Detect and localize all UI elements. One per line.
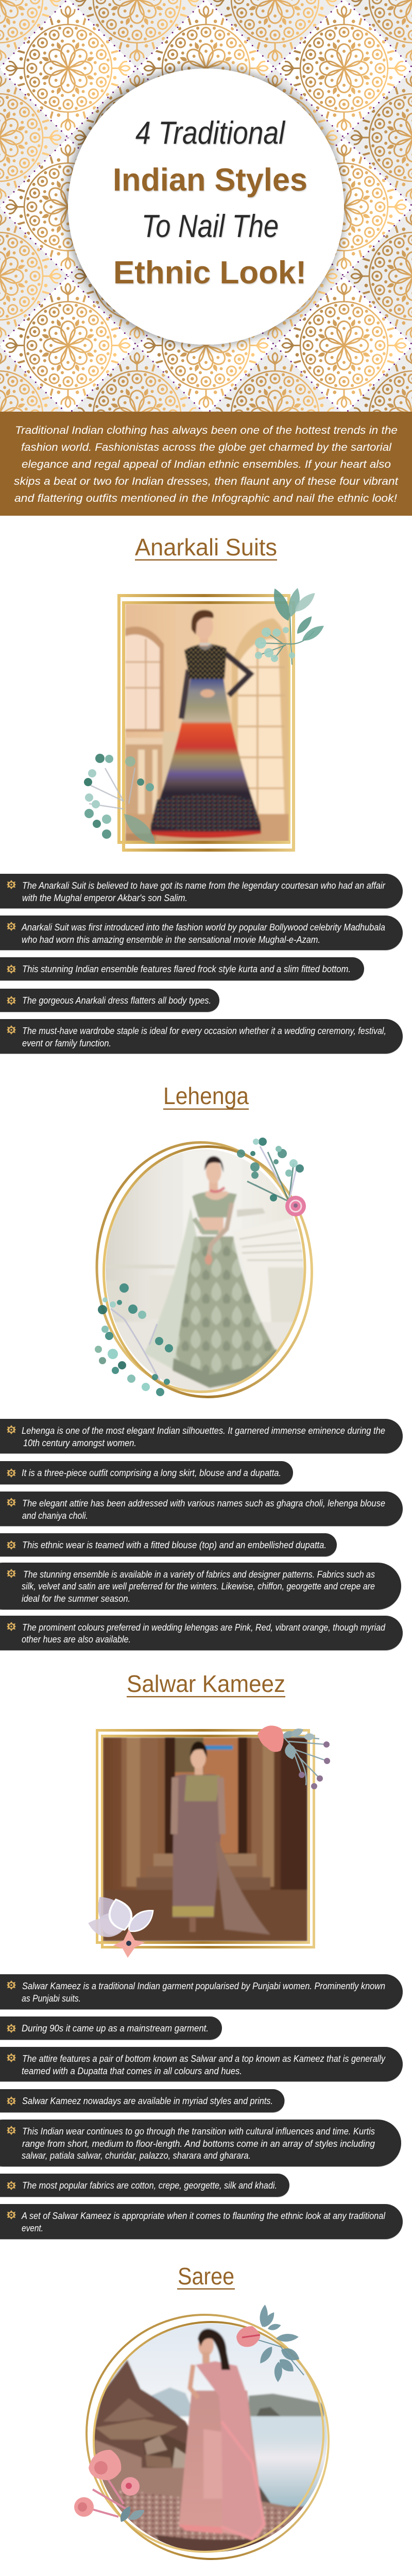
bullet 2 (0, 1461, 293, 1485)
bullet 5 (0, 1563, 401, 1610)
bullet 1 (0, 874, 403, 909)
intro band (0, 412, 412, 516)
heading: Saree: Saree (178, 2263, 234, 2290)
title circle (68, 69, 344, 345)
bullet 1: Salwar Kameez is a traditional Indian garment popularised by Punjabi women. Prominently known (22, 1981, 385, 1991)
bullets: Anarkali (0, 874, 403, 1054)
figure: woman in salwar kameez (173, 1741, 270, 1935)
title text (113, 115, 307, 291)
bullet 3 (0, 1492, 403, 1527)
intro band: skips a beat or two for Indian dresses, then flaunt any of these four vibrant (14, 476, 399, 487)
bullet 2: During 90s it came up as a mainstream garment. (22, 2023, 209, 2033)
bullet 5: ideal for the summer season. (22, 1594, 130, 1604)
icon: pink flowers lower left (74, 2450, 146, 2524)
intro band: and flattering outfits mentioned in the Infographic and nail the ethnic look! (14, 493, 397, 504)
bullet 2: Anarkali Suit was first introduced into the fashion world by popular Bollywood celebrity Madhubala (21, 922, 385, 933)
bullet 5: The stunning ensemble is available in a variety of fabrics and designer patterns. Fabrics such as (23, 1569, 375, 1580)
title text: 4 Traditional (135, 115, 286, 151)
bullets: Lehenga (0, 1419, 403, 1651)
bullet 6 (0, 2174, 289, 2197)
bullet 2: who had worn this amazing ensemble in the sensational movie Mughal-e-Azam. (22, 935, 320, 945)
photo panel: Saree in gold rings (74, 2304, 330, 2559)
icon: flower and leaves upper right (236, 2304, 304, 2382)
bullet 1 (0, 1974, 403, 2010)
bullet 4 (0, 2089, 284, 2113)
bullet 3: teamed with a Dupatta that comes in all colours and hues. (22, 2066, 242, 2076)
heading: Anarkali Suits: Anarkali Suits (135, 534, 277, 561)
heading: Salwar Kameez: Salwar Kameez (127, 1670, 285, 1697)
bullet 1: with the Mughal emperor Akbar's son Salim. (22, 893, 187, 903)
bullets: Salwar Kameez (0, 1974, 403, 2240)
bullet 3 (0, 957, 364, 981)
bullet 1: Lehenga is one of the most elegant Indian silhouettes. It garnered immense eminence during the (22, 1426, 385, 1436)
bullet 5 (0, 1019, 403, 1054)
icon: lavender leaves and flower lower left (86, 1890, 158, 1958)
photo panel: Lehenga in gold rings (95, 1138, 312, 1397)
icon: foliage lower left (84, 754, 160, 849)
hero mandala pattern background (0, 0, 412, 412)
photo panel: Anarkali suit in gold frame (84, 586, 327, 850)
icon: foliage and rose upper right (237, 1138, 306, 1216)
bullet 3: The elegant attire has been addressed with various names such as ghagra choli, lehenga blouse (22, 1498, 385, 1509)
icon: flower and leaves upper right (258, 1725, 330, 1789)
heading: Lehenga: Lehenga (163, 1082, 249, 1109)
bullet 3 (0, 2047, 403, 2082)
bullet 7: event. (22, 2223, 43, 2233)
bullet 7 (0, 2204, 403, 2240)
title text: Indian Styles (113, 162, 307, 198)
figure: woman in Anarkali (150, 610, 261, 838)
figure: woman in lehenga (144, 1156, 278, 1388)
bullet 3: and chaniya choli. (22, 1511, 88, 1521)
bullet 4: Salwar Kameez nowadays are available in myriad styles and prints. (22, 2096, 273, 2106)
bullet 4 (0, 1533, 337, 1557)
bullet 6: The most popular fabrics are cotton, crepe, georgette, silk and khadi. (22, 2180, 277, 2191)
photo panel: Salwar Kameez in gold frame (86, 1725, 330, 1958)
bullet 7: A set of Salwar Kameez is appropriate when it comes to flaunting the ethnic look at any traditional (21, 2211, 386, 2221)
bullet 4 (0, 989, 219, 1012)
bullet 5: This Indian wear continues to go through the transition with cultural influences and time. Kurtis (22, 2126, 375, 2137)
bullet 5: salwar, patiala salwar, churidar, palazzo, sharara and gharara. (22, 2150, 251, 2161)
bullet 4: This ethnic wear is teamed with a fitted blouse (top) and an embellished dupatta. (22, 1540, 327, 1550)
title text: Ethnic Look! (113, 255, 306, 291)
bullet 2 (0, 916, 403, 951)
bullet 6 (0, 1616, 403, 1651)
bullet 1 (0, 1419, 403, 1454)
bullet 5 (0, 2120, 401, 2167)
icon: foliage lower left (95, 1283, 173, 1396)
bullet 6: other hues are also available. (22, 1634, 131, 1645)
bullet 4: The gorgeous Anarkali dress flatters all body types. (22, 995, 211, 1006)
bullet 2 (0, 2016, 222, 2040)
intro band: Traditional Indian clothing has always been one of the hottest trends in the (15, 425, 398, 436)
figure: woman in saree (179, 2329, 264, 2539)
bullet 5: range from short, medium to floor-length. And bottoms come in an array of styles including (22, 2139, 375, 2149)
bullet 5: silk, velvet and satin are well preferred for the winters. Likewise, chiffon, georgette and crepe are (22, 1581, 375, 1591)
bullet 5: event or family function. (22, 1038, 111, 1048)
bullet 2: It is a three-piece outfit comprising a long skirt, blouse and a dupatta. (22, 1468, 281, 1478)
intro band: fashion world. Fashionistas across the globe get charmed by the sartorial (21, 442, 392, 453)
bullet 1: as Punjabi suits. (22, 1993, 81, 2004)
intro band: elegance and regal appeal of Indian ethnic ensembles. If your heart also (22, 459, 391, 470)
bullet 3: This stunning Indian ensemble features flared frock style kurta and a slim fitted bottom. (22, 964, 351, 974)
bullet 1: The Anarkali Suit is believed to have got its name from the legendary courtesan who had an affair (22, 880, 386, 891)
icon: foliage upper right (255, 586, 327, 665)
bullet 1: 10th century amongst women. (23, 1438, 136, 1448)
title text: To Nail The (142, 209, 279, 244)
